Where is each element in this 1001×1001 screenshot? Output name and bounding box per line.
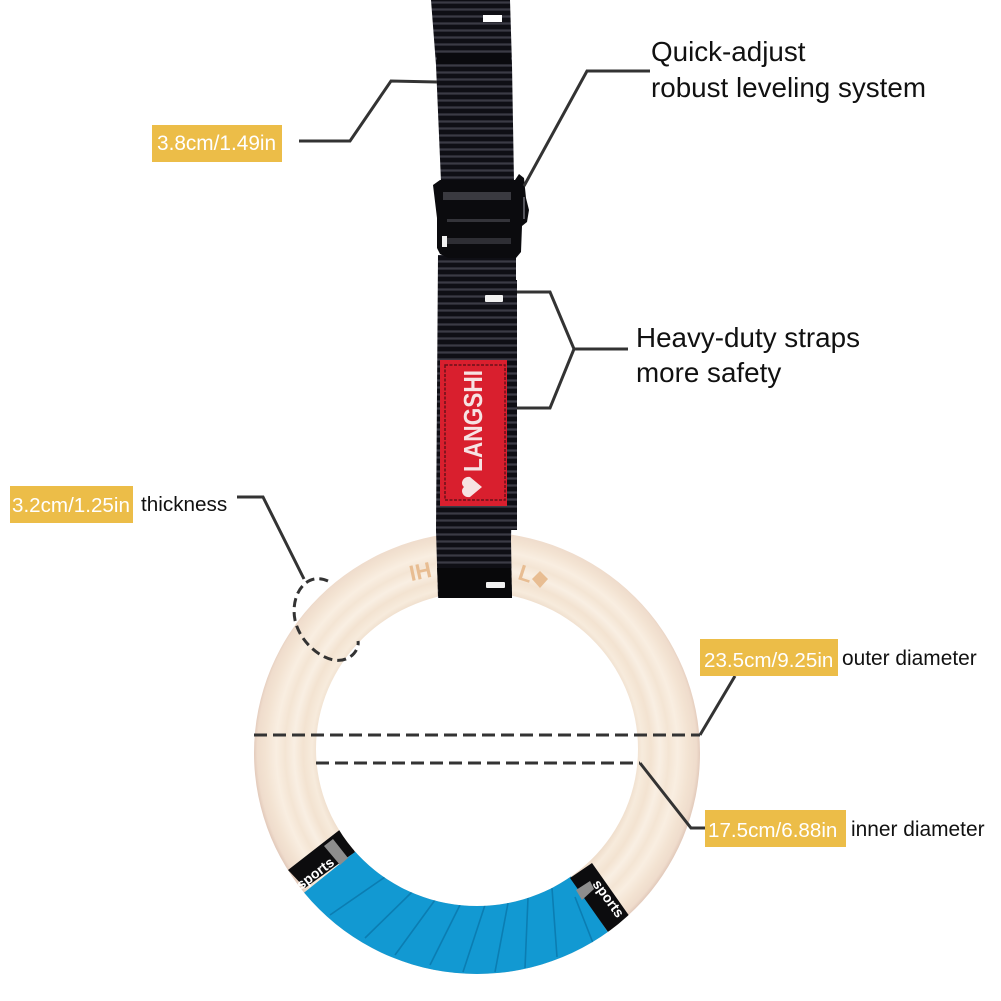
dashed circle: thickness: [294, 579, 358, 660]
engraved brand on ring: [407, 557, 548, 588]
callout: thickness: [10, 486, 227, 523]
tape seams: [330, 877, 593, 972]
left black band: [288, 828, 355, 888]
callout: more safety: more safety: [636, 357, 781, 388]
callout: leveling system: robust leveling system: [651, 72, 926, 103]
leader: inner diameter: [640, 763, 705, 828]
white stitched tag top: [483, 15, 502, 22]
right black band: [570, 863, 630, 932]
callout: strap width: 3.8cm/1.49in: [157, 132, 276, 155]
white stitched tag middle: [485, 295, 503, 302]
callout: quick-adjust: Quick-adjust: [651, 36, 806, 67]
left band grey stripe: [324, 839, 348, 865]
folded strap end: [437, 568, 512, 598]
leader: heavy-duty straps: [517, 292, 628, 408]
wooden ring: [254, 532, 700, 974]
red brand label: [440, 360, 507, 506]
inner diameter dashed line: [316, 762, 640, 764]
callout: inner diameter: 17.5cm/6.88in: [708, 819, 837, 842]
callout: inner diameter: [705, 810, 985, 847]
leader: strap width: [299, 81, 437, 141]
callout: thickness: 3.2cm/1.25in: [12, 494, 130, 517]
strap front: [431, 0, 516, 598]
callout: outer diameter: 23.5cm/9.25in: [704, 649, 833, 672]
callout: heavy-duty: Heavy-duty straps: [636, 322, 860, 353]
brand logo: [462, 477, 482, 497]
callout: strap width: [152, 125, 282, 162]
brand name: LANGSHI: [458, 370, 488, 472]
right band grey stripe: [576, 881, 594, 900]
strap rear layer: [500, 280, 517, 530]
leader: leveling system: [524, 71, 650, 186]
engraved brand on ring: L: [515, 560, 536, 588]
callout: outer diameter: [700, 639, 977, 676]
white stitched tag bottom: [486, 582, 505, 588]
blue grip tape: [288, 830, 628, 974]
callout: inner diameter: inner diameter: [851, 818, 985, 841]
engraved brand on ring: IH: [407, 557, 434, 586]
leader: outer diameter: [700, 676, 735, 735]
leader: thickness: [237, 497, 304, 579]
buckle: [433, 174, 529, 258]
outer diameter dashed line: [254, 734, 700, 736]
sports text right: sports: [590, 876, 628, 921]
callout: thickness: thickness: [141, 493, 227, 516]
callout: outer diameter: outer diameter: [842, 647, 977, 670]
sports text left: sports: [293, 854, 337, 892]
